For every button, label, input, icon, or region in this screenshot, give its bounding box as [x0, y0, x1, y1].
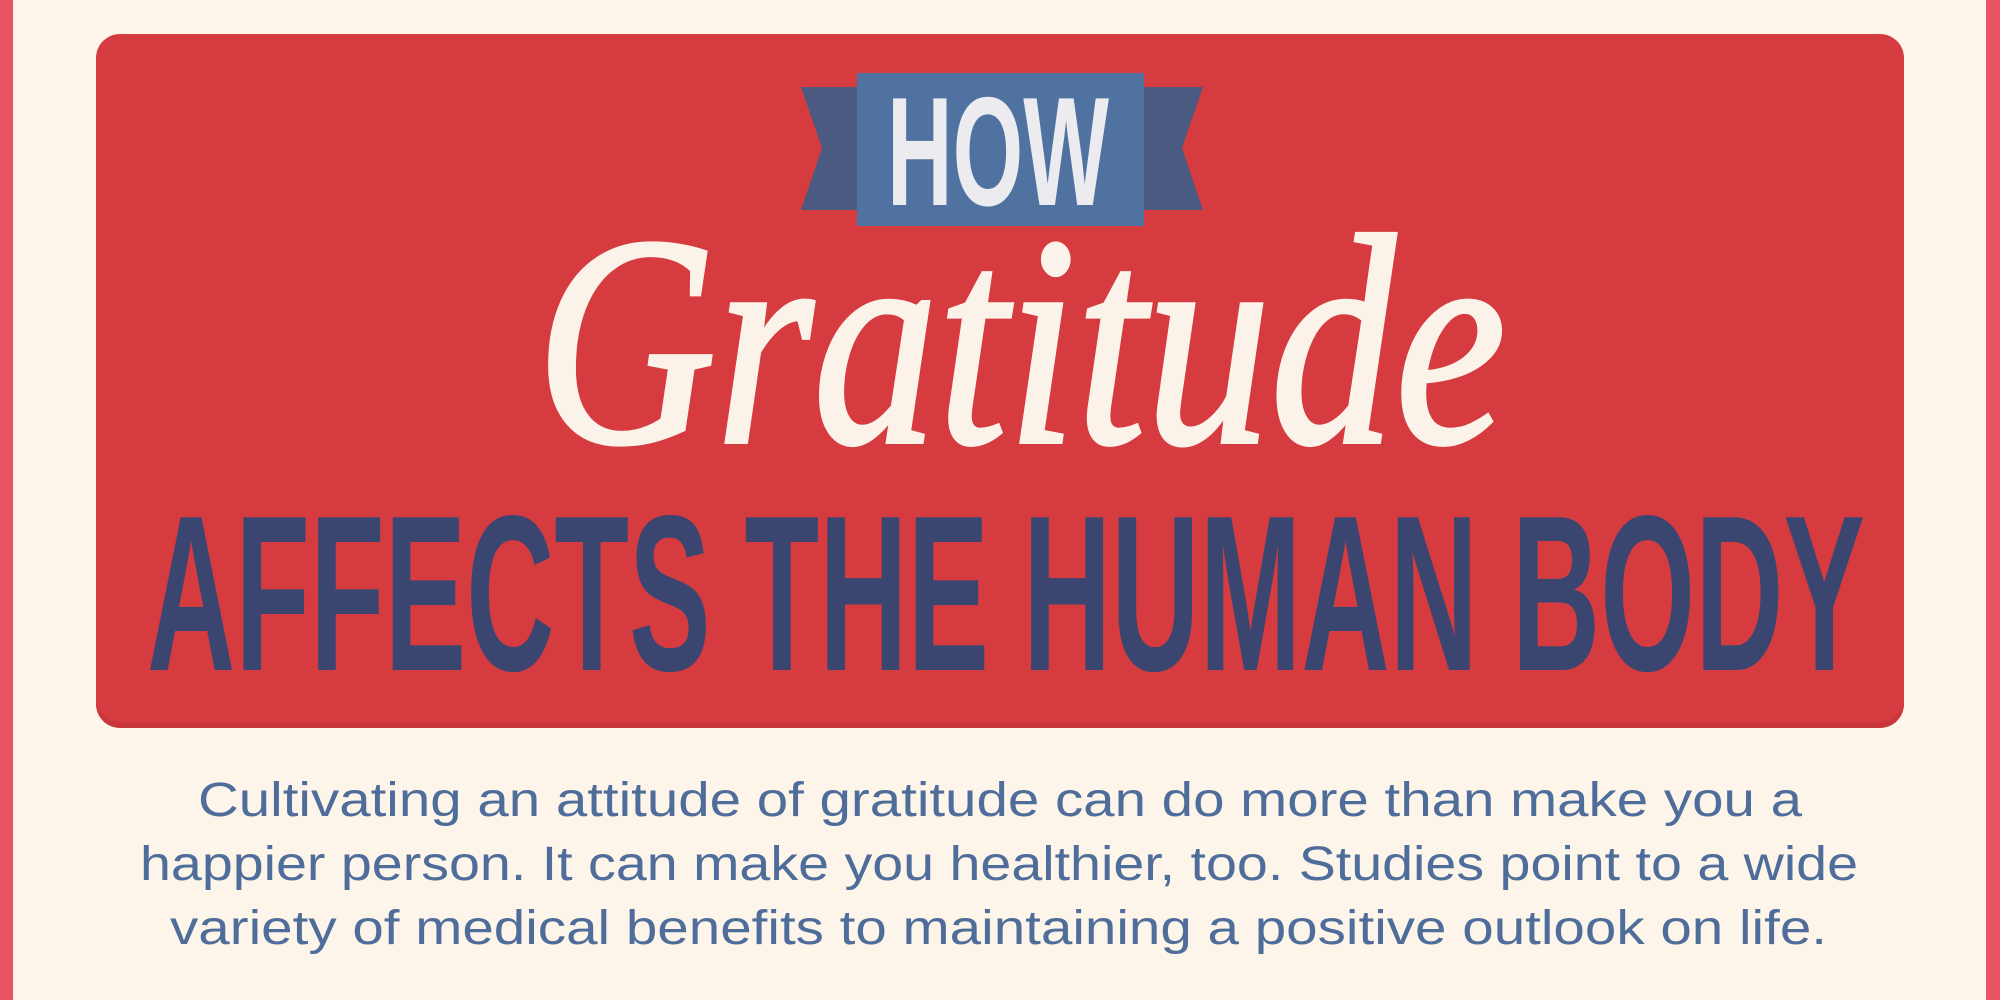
- heading: Gratitude: Gratitude: [536, 175, 1506, 507]
- text block: intro paragraph: happier person. It can make you healthier, too. Studies point to a wide: [140, 838, 1858, 891]
- text block: intro paragraph: Cultivating an attitude of gratitude can do more than make you a: [198, 774, 1802, 827]
- ribbon: HOW: [801, 65, 1203, 238]
- heading: HOW: HOW: [887, 65, 1109, 238]
- text block: intro paragraph: variety of medical benefits to maintaining a positive outlook on life.: [170, 902, 1827, 955]
- side border left: [0, 0, 13, 1000]
- side border right: [1986, 0, 2000, 1000]
- text block: intro paragraph: [140, 774, 1858, 955]
- panel: title banner: [96, 34, 1904, 728]
